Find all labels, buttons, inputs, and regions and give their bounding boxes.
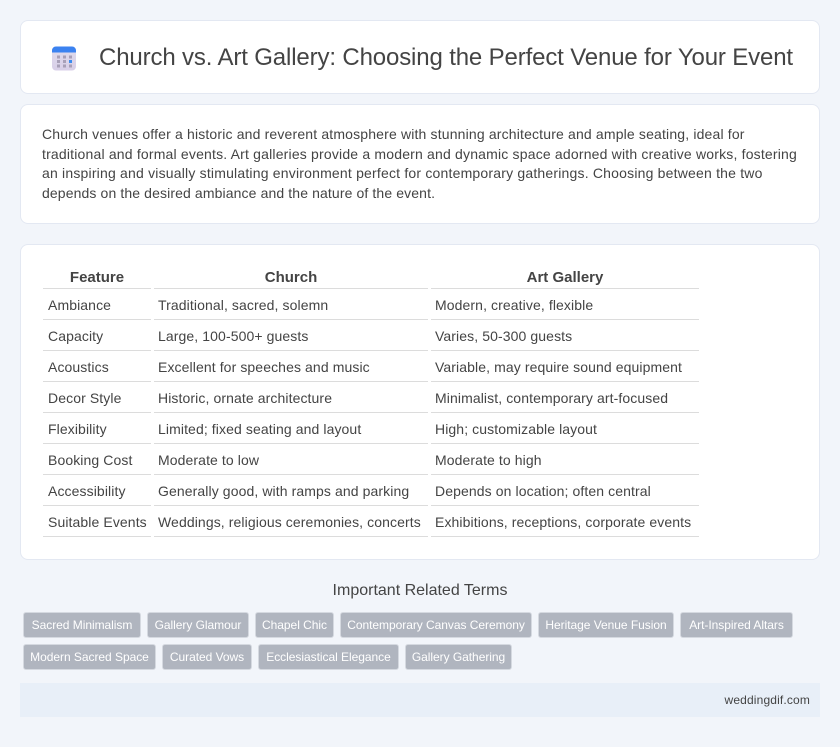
related terms tags: Sacred Minimalism <box>32 618 132 632</box>
comparison table: Historic, ornate architecture <box>158 390 332 406</box>
intro paragraph: an inspiring and visually stimulating environment perfect for contemporary gatherings. Choosing between the two <box>42 165 763 181</box>
comparison table: Limited; fixed seating and layout <box>158 421 361 437</box>
header panel <box>20 20 820 94</box>
comparison table: Art Gallery <box>527 269 603 286</box>
comparison table <box>43 269 699 537</box>
intro paragraph: Church venues offer a historic and reverent atmosphere with stunning architecture and ample seating, ideal for <box>42 126 745 142</box>
related terms tags: Chapel Chic <box>262 618 327 632</box>
related terms tags <box>23 612 793 670</box>
related terms tags: Heritage Venue Fusion <box>545 618 667 632</box>
comparison table: Moderate to low <box>158 452 259 468</box>
comparison table: Depends on location; often central <box>435 483 651 499</box>
title: Church vs. Art Gallery: Choosing the Perfect Venue for Your Event <box>99 44 793 71</box>
comparison table: Moderate to high <box>435 452 542 468</box>
comparison table: Decor Style <box>48 390 121 406</box>
related terms tags: Gallery Glamour <box>155 618 241 632</box>
related terms heading: Important Related Terms <box>333 582 507 599</box>
comparison table: Traditional, sacred, solemn <box>158 297 328 313</box>
comparison table: Generally good, with ramps and parking <box>158 483 409 499</box>
comparison table panel <box>20 244 820 560</box>
comparison table: Church <box>265 269 317 286</box>
comparison table: Capacity <box>48 328 103 344</box>
comparison table: Accessibility <box>48 483 126 499</box>
footer bar <box>20 683 820 717</box>
comparison table: Booking Cost <box>48 452 132 468</box>
comparison table: Modern, creative, flexible <box>435 297 593 313</box>
related terms tags: Modern Sacred Space <box>30 650 149 664</box>
intro paragraph: traditional and formal events. Art galleries provide a modern and dynamic space adorned with creative works, fostering <box>42 146 797 162</box>
comparison table: Large, 100-500+ guests <box>158 328 308 344</box>
icon: calendar <box>52 46 76 70</box>
comparison table: Weddings, religious ceremonies, concerts <box>158 514 421 530</box>
intro paragraph <box>42 126 797 201</box>
comparison table: Ambiance <box>48 297 111 313</box>
related terms tags: Gallery Gathering <box>412 650 505 664</box>
intro text panel <box>20 104 820 224</box>
comparison table: Acoustics <box>48 359 109 375</box>
related terms tags: Ecclesiastical Elegance <box>266 650 391 664</box>
comparison table: Feature <box>70 269 124 286</box>
comparison table: Excellent for speeches and music <box>158 359 370 375</box>
comparison table: Variable, may require sound equipment <box>435 359 682 375</box>
related terms tags: Curated Vows <box>170 650 244 664</box>
comparison table: High; customizable layout <box>435 421 597 437</box>
related terms tags: Art-Inspired Altars <box>689 618 784 632</box>
comparison table: Flexibility <box>48 421 107 437</box>
comparison table: Varies, 50-300 guests <box>435 328 572 344</box>
intro paragraph: depends on the desired ambiance and the nature of the event. <box>42 185 435 201</box>
comparison table: Minimalist, contemporary art-focused <box>435 390 668 406</box>
comparison table: Suitable Events <box>48 514 147 530</box>
footer source text: weddingdif.com <box>725 693 810 707</box>
related terms tags: Contemporary Canvas Ceremony <box>347 618 525 632</box>
comparison table: Exhibitions, receptions, corporate events <box>435 514 691 530</box>
